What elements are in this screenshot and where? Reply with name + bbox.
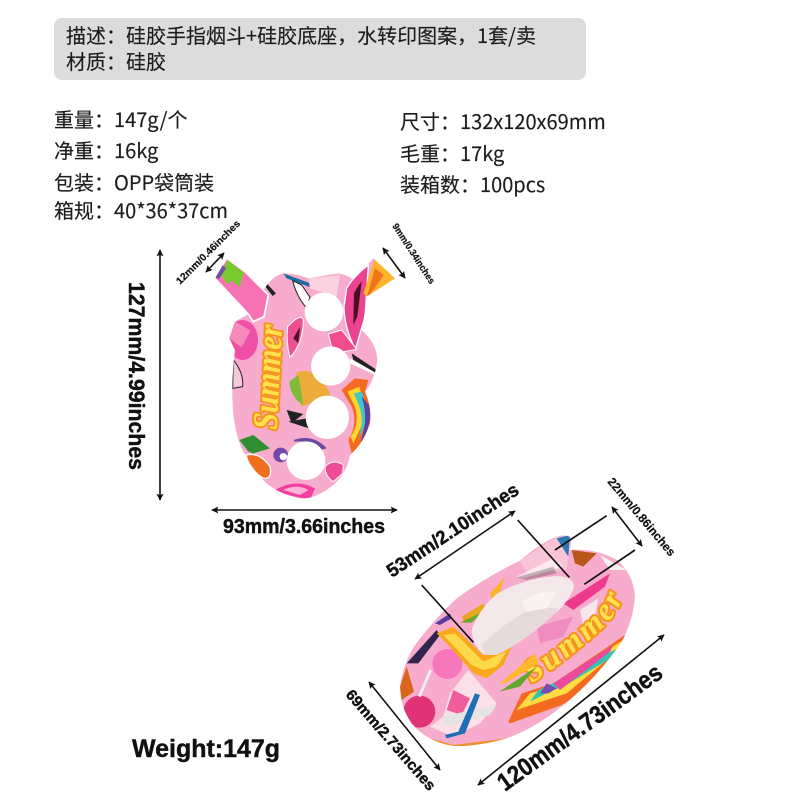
specifications left column: 重量：147g/个 (54, 104, 187, 133)
dimension: left stem label: 12mm/0.46inches (174, 218, 243, 287)
specifications right column: 毛重：17kg (400, 138, 504, 167)
taco (500, 653, 538, 683)
dimension: width arrow (212, 509, 397, 511)
tray opening (472, 576, 574, 655)
Summer lettering: Summer (246, 323, 290, 430)
dimension: tray length label: 53mm/2.10inches (383, 480, 523, 582)
dimension: rim width label: 22mm/0.86inches (605, 475, 679, 559)
dimension: overall height label: 127mm/4.99inches (124, 282, 149, 470)
pink sticker (227, 320, 258, 360)
specifications right column (400, 106, 606, 198)
dimension: right stem arrow (383, 248, 405, 278)
dimension: base length arrow (478, 635, 664, 785)
taco (296, 371, 330, 407)
description text: 描述：硅胶手指烟斗+硅胶底座，水转印图案，1套/卖 (66, 20, 536, 49)
description panel (54, 18, 586, 80)
rainbow on base (508, 633, 627, 723)
specifications left column: 包装：OPP袋筒装 (54, 167, 214, 196)
dimension: base height label: 69mm/2.73inches (342, 686, 439, 794)
dimension: left stem arrow (206, 253, 224, 272)
strawberry stem (215, 258, 268, 322)
specifications left column (54, 104, 228, 224)
dimension guide lines on tray (422, 516, 635, 642)
dimension: overall height arrow (159, 250, 161, 500)
specifications right column: 尺寸：132x120x69mm (400, 106, 606, 135)
Summer lettering on base: Summer (522, 588, 623, 685)
dark streaks (407, 630, 440, 663)
product: base tray angled view (400, 515, 636, 746)
finger holes (287, 293, 350, 480)
rim lettering (437, 627, 513, 678)
material text: 材质：硅胶 (66, 46, 166, 75)
specifications right column: 装箱数：100pcs (400, 169, 545, 198)
specifications left column: 箱规：40*36*37cm (54, 195, 228, 224)
dimension: tray length arrow (415, 511, 515, 579)
dimension: right stem label: 9mm/0.34inches (389, 222, 437, 286)
product: finger pipe front view (210, 253, 400, 503)
dimension: width label: 93mm/3.66inches (223, 516, 385, 538)
big lips (344, 265, 368, 349)
dimension: rim width arrow (612, 507, 642, 546)
dimension: base height arrow (369, 682, 440, 770)
specifications left column: 净重：16kg (54, 135, 158, 164)
weight label: Weight:147g (132, 735, 280, 763)
rainbow (342, 378, 371, 453)
carrot (246, 454, 271, 478)
cherry and drinks (400, 667, 414, 700)
dimension: base length label: 120mm/4.73inches (492, 658, 668, 797)
